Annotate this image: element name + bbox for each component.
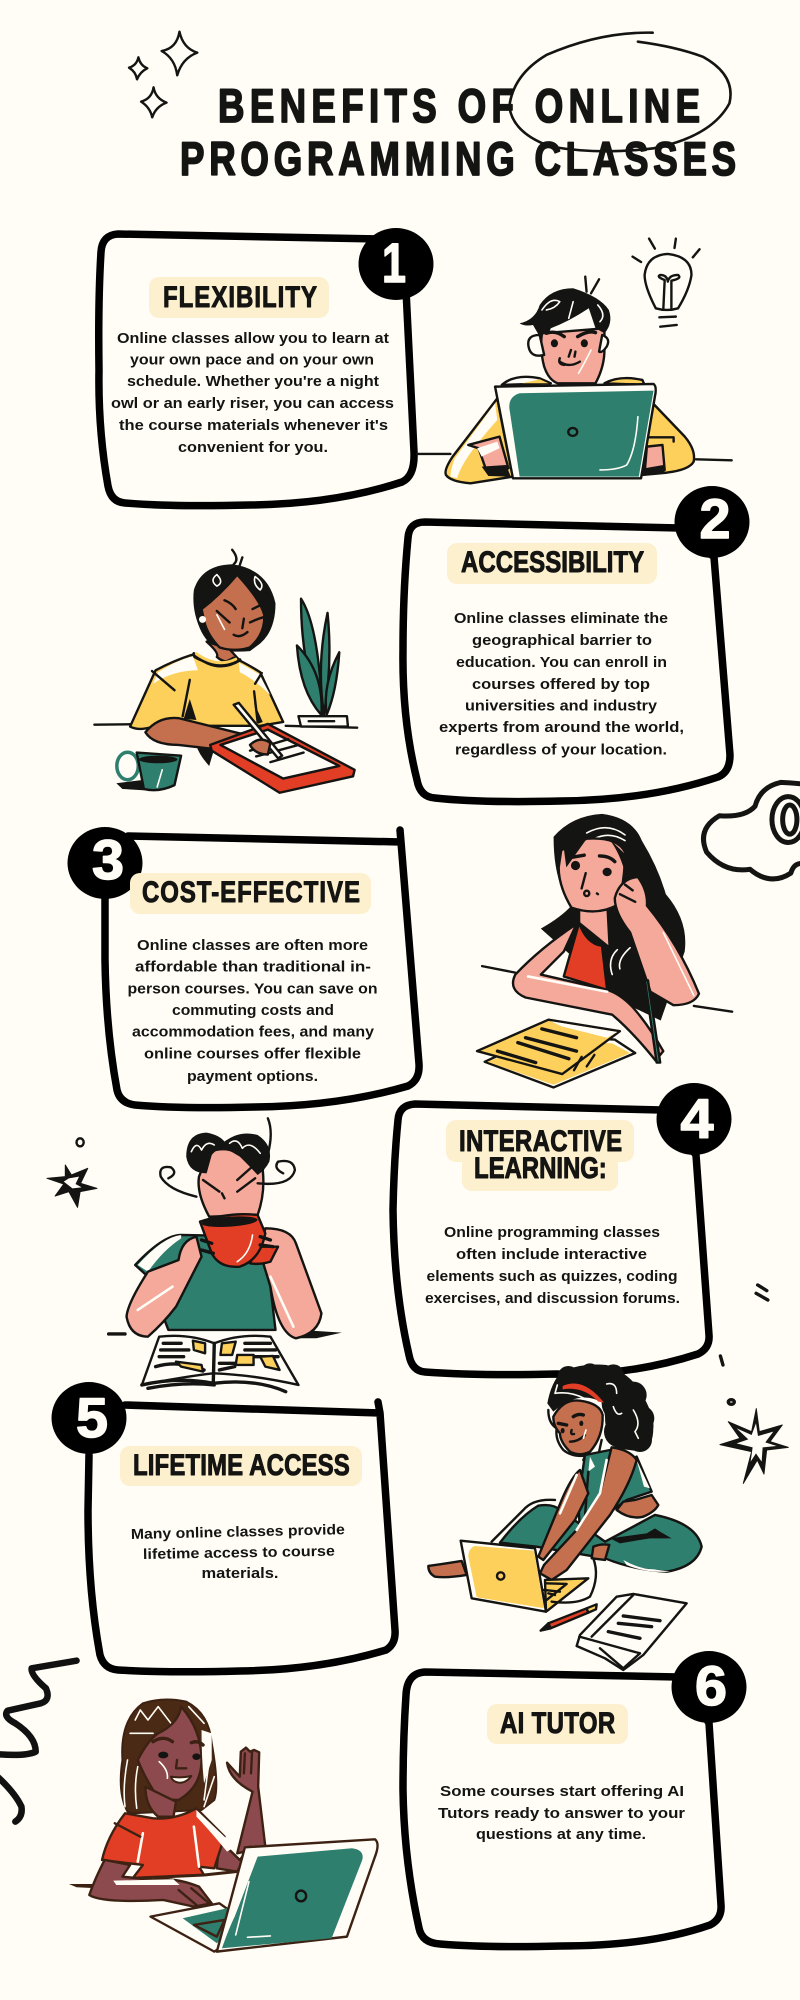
body text card 4: Online programming classes [444, 1225, 660, 1241]
body text card 1 [111, 331, 394, 456]
heading: lifetime access: LIFETIME ACCESS [133, 1447, 350, 1482]
illustration: long haired woman with papers [477, 814, 732, 1087]
body text card 2: Online classes eliminate the [454, 611, 668, 627]
card 1 outline [99, 234, 414, 506]
body text card 6: questions at any time. [476, 1827, 646, 1843]
heading: cost-effective: COST-EFFECTIVE [142, 874, 360, 909]
card 2 outline [403, 522, 730, 802]
body text card 4: often include interactive [456, 1247, 647, 1263]
card 5 outline [88, 1402, 395, 1672]
illustration: boy with green laptop [417, 277, 732, 483]
number badge 2 [674, 486, 750, 558]
body text card 1: owl or an early riser, you can access [111, 396, 394, 412]
heading: accessibility: ACCESSIBILITY [461, 544, 644, 579]
number badge 5 [52, 1382, 126, 1454]
panel: card 2 accessibility [403, 486, 750, 802]
body text card 3: payment options. [187, 1069, 318, 1085]
number badge 1: 1 [382, 231, 406, 294]
card 4 outline [393, 1104, 709, 1375]
body text card 4: exercises, and discussion forums. [425, 1291, 680, 1307]
body text card 4 [425, 1225, 680, 1307]
card 3 outline [105, 830, 419, 1108]
illustration: man sipping from red cup over open book [109, 1118, 342, 1392]
body text card 3: Online classes are often more [137, 938, 368, 954]
heading: interactive learning: INTERACTIVE [459, 1123, 622, 1158]
number badge 3 [68, 827, 142, 899]
body text card 3: commuting costs and [172, 1003, 334, 1019]
body text card 6 [438, 1784, 685, 1843]
number badge 1 [358, 228, 434, 300]
heading: flexibility: FLEXIBILITY [163, 279, 317, 314]
body text card 2: courses offered by top [472, 677, 650, 693]
body text card 2: universities and industry [465, 698, 657, 714]
heading: interactive learning: LEARNING: [474, 1150, 607, 1185]
body text card 5: materials. [202, 1566, 278, 1582]
title line one: BENEFITS OF ONLINE [218, 80, 700, 132]
number badge 5: 5 [76, 1386, 108, 1449]
number badge 6: 6 [695, 1654, 727, 1717]
heading: interactive learning [446, 1120, 634, 1191]
body text card 2: experts from around the world, [439, 720, 684, 736]
body text card 1: Online classes allow you to learn at [117, 331, 389, 347]
panel: card 5 lifetime access [52, 1382, 395, 1672]
body text card 1: the course materials whenever it's [119, 418, 388, 434]
number badge 6 [672, 1651, 746, 1723]
title line two: PROGRAMMING CLASSES [180, 133, 736, 185]
doodle: star and dot right of illustration 5 [720, 1400, 788, 1483]
illustration: curly haired girl with yellow laptop [428, 1363, 702, 1670]
body text card 3: online courses offer flexible [144, 1046, 361, 1062]
body text card 5 [131, 1522, 345, 1582]
panel: card 6 ai tutor [403, 1651, 746, 1947]
body text card 3: accommodation fees, and many [132, 1024, 374, 1040]
hand drawn circle around online [509, 33, 731, 151]
body text card 5: lifetime access to course [143, 1544, 335, 1563]
number badge 3: 3 [92, 828, 124, 891]
doodle: black squiggle at left edge [0, 1661, 77, 1822]
doodle: scribbled flower at right edge [703, 782, 800, 879]
body text card 6: Some courses start offering AI [440, 1784, 684, 1800]
panel: card 1 flexibility [99, 228, 434, 506]
body text card 3: affordable than traditional in- [135, 960, 371, 976]
card 6 outline [403, 1672, 721, 1947]
body text card 5: Many online classes provide [131, 1522, 345, 1543]
heading: ai tutor [487, 1704, 628, 1744]
body text card 2: regardless of your location. [455, 742, 667, 758]
body text card 1: convenient for you. [178, 440, 328, 456]
illustration: girl writing on tablet with plant and cup [94, 550, 357, 793]
illustration: waving girl with green laptop [69, 1700, 378, 1952]
number badge 4: 4 [680, 1087, 714, 1150]
body text card 2: education. You can enroll in [456, 655, 667, 671]
number badge 2: 2 [700, 487, 730, 550]
icon: light bulb [633, 239, 700, 327]
panel: card 4 interactive learning [393, 1083, 732, 1375]
panel: card 3 cost-effective [68, 827, 419, 1108]
body text card 2 [439, 611, 684, 758]
heading: ai tutor: AI TUTOR [500, 1705, 616, 1740]
body text card 1: schedule. Whether you're a night [127, 374, 379, 390]
body text card 6: Tutors ready to answer to your [438, 1806, 685, 1822]
body text card 2: geographical barrier to [472, 633, 652, 649]
doodle: stars and specks around card 4 [47, 1138, 768, 1365]
body text card 3 [128, 938, 378, 1085]
number badge 4 [656, 1083, 732, 1155]
body text card 3: person courses. You can save on [128, 982, 378, 998]
body text card 1: your own pace and on your own [130, 352, 374, 368]
title [180, 33, 736, 185]
decorative sparkles near title [129, 32, 197, 117]
body text card 4: elements such as quizzes, coding [426, 1269, 678, 1285]
